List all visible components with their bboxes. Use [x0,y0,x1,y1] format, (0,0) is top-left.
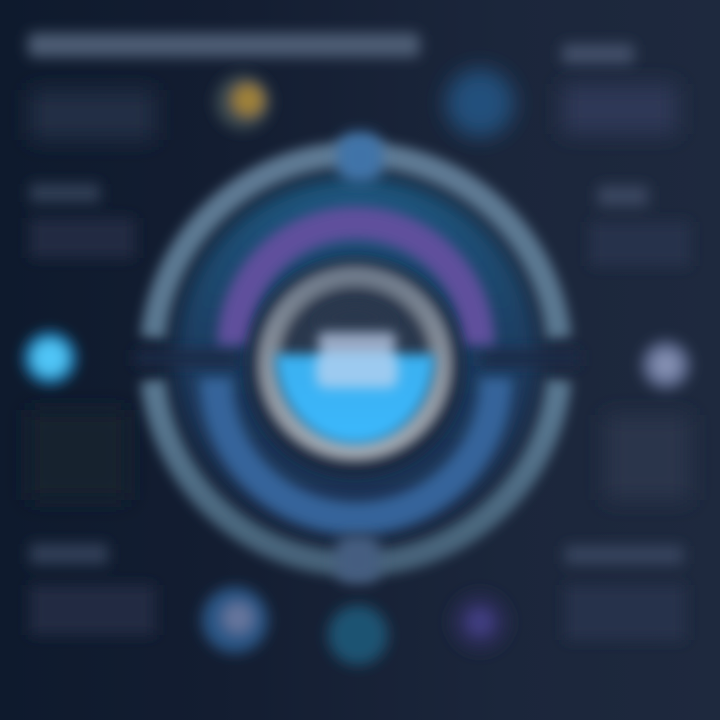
upper dark core [315,306,395,325]
circular diagram [135,132,580,583]
centre highlight [316,332,398,388]
icon: top blue [446,69,514,137]
outer ring [153,154,559,564]
text block: bottom left [30,544,155,635]
text block: upper left [30,184,135,258]
bottom node [336,535,380,583]
purple arc [234,223,478,345]
text block: top left [30,90,155,140]
icon: left glowing [22,330,78,386]
title [28,33,420,57]
text block: upper right [590,186,690,266]
lower blue ring [216,378,496,518]
dark core surround [247,259,463,475]
horizontal dark band [135,350,580,366]
text block: bottom right [565,546,685,640]
icon: right pale [642,341,690,389]
icon: bottom left [202,587,268,653]
inner blue disc [174,176,538,540]
top node [337,132,383,182]
heading: top right [562,44,634,64]
icon: bottom centre [328,605,388,665]
text block: lower left [28,410,128,500]
icon: top orange [215,74,271,130]
grey ring [267,275,443,451]
water fill [275,354,435,444]
icon: bottom right [450,592,510,652]
text block: lower right [605,415,690,500]
text block: top right [562,84,677,134]
